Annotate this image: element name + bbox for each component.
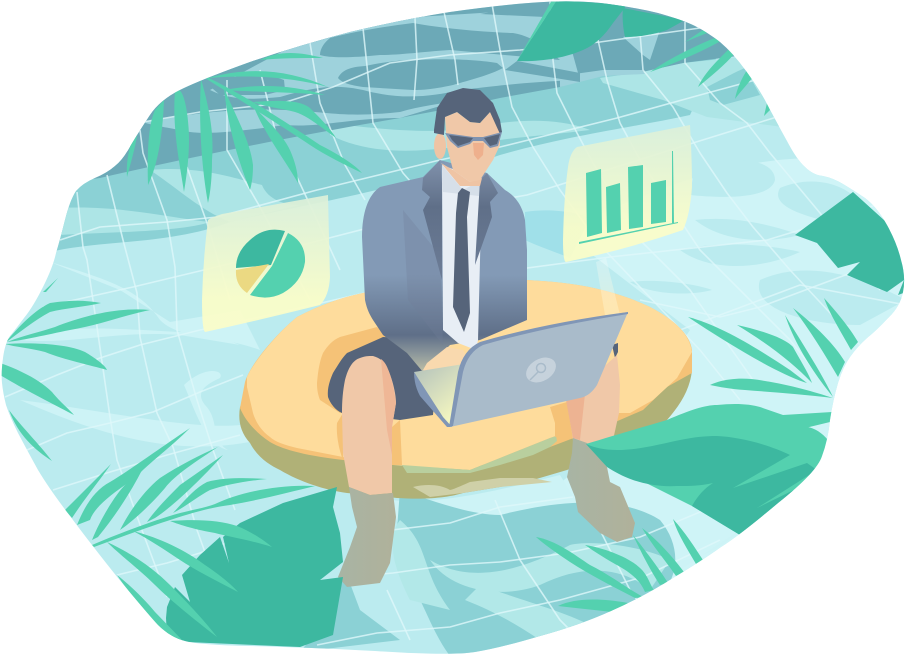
left lapel	[422, 160, 442, 280]
broad leaf dark	[586, 436, 817, 535]
left leg	[342, 356, 396, 495]
right leg	[567, 355, 620, 445]
water: mid patch upper right	[707, 68, 760, 105]
left floating panel with pie chart	[202, 195, 330, 332]
leaves: right dark leaf	[795, 192, 906, 295]
panel: left glass card	[202, 195, 330, 332]
ring: pale reflection on olive	[413, 478, 552, 497]
water: mid teal zone	[56, 50, 716, 250]
laptop base with keyboard	[414, 343, 480, 427]
hair	[434, 88, 502, 135]
ring: light top surface	[247, 280, 692, 470]
shorts cuff right	[612, 343, 618, 357]
shorts	[328, 337, 440, 420]
face	[445, 112, 500, 182]
leaves: right palm frond	[688, 298, 858, 398]
water: lower-left light bands	[21, 263, 563, 522]
laptop	[414, 312, 628, 427]
leaves: lower-left palm frond	[65, 428, 315, 642]
water: pale bands through mid zone	[60, 121, 590, 235]
left sock	[338, 487, 396, 587]
ring: orange shaded rim	[240, 280, 692, 468]
left leg shading	[381, 359, 396, 455]
sunglasses	[445, 132, 502, 148]
collar shadow	[442, 165, 482, 196]
ring: inner orange strip right	[550, 402, 572, 437]
ring: beam from bar panel	[596, 258, 620, 315]
ear	[434, 133, 446, 159]
ring: orange patch behind left leg	[337, 413, 343, 460]
water: lighter right side	[564, 158, 904, 578]
leaves: top-right palm frond	[650, 30, 770, 116]
businessman	[328, 88, 635, 587]
laptop logo	[522, 352, 560, 388]
water: ripple patches right	[630, 160, 906, 325]
leaves: left palm frond	[0, 278, 150, 461]
nose	[473, 143, 484, 160]
right floating panel with bar chart	[563, 125, 692, 262]
pie chart	[236, 230, 305, 298]
leaves: lower-right broad leaf	[586, 404, 832, 535]
leaves: bottom-right palm frond	[536, 519, 703, 612]
laptop lid edge	[449, 312, 628, 427]
hand on keyboard	[423, 347, 468, 393]
right lapel	[475, 173, 498, 265]
water: lower-right dark patches	[300, 490, 675, 656]
ring: inner hole shade	[317, 327, 386, 413]
ring: orange strip right of left leg	[392, 420, 402, 465]
tie	[453, 188, 470, 332]
leaf edge highlight	[517, 0, 557, 61]
water: blue shade behind jacket	[525, 210, 564, 256]
jacket body	[362, 160, 527, 372]
water: pale reflections in dark zone	[143, 8, 660, 133]
laptop lid	[450, 312, 628, 427]
leaves: lower-left broad leaf	[166, 487, 343, 647]
inflatable pool ring	[239, 258, 692, 499]
leaves: top-right broad leaves	[517, 0, 685, 61]
neck shade	[441, 163, 482, 186]
water: pale wedge upper right	[600, 57, 790, 128]
shirt	[442, 165, 482, 350]
ring: green water reflection	[402, 436, 557, 473]
right sock	[567, 438, 635, 542]
bar chart	[579, 151, 678, 244]
broad leaf light	[586, 404, 832, 535]
ring: olive underside	[239, 373, 692, 499]
water: lower-right pale swirls	[393, 520, 670, 640]
panel: right glass card	[563, 125, 692, 262]
leaves: top-left palm frond	[127, 53, 362, 203]
right leg inner shade	[566, 394, 585, 440]
water: dark blobs in upper reflection	[212, 8, 580, 95]
jacket fold shade	[403, 210, 443, 345]
water: dark teal upper zone	[93, 1, 734, 179]
laptop base edge	[414, 372, 452, 427]
